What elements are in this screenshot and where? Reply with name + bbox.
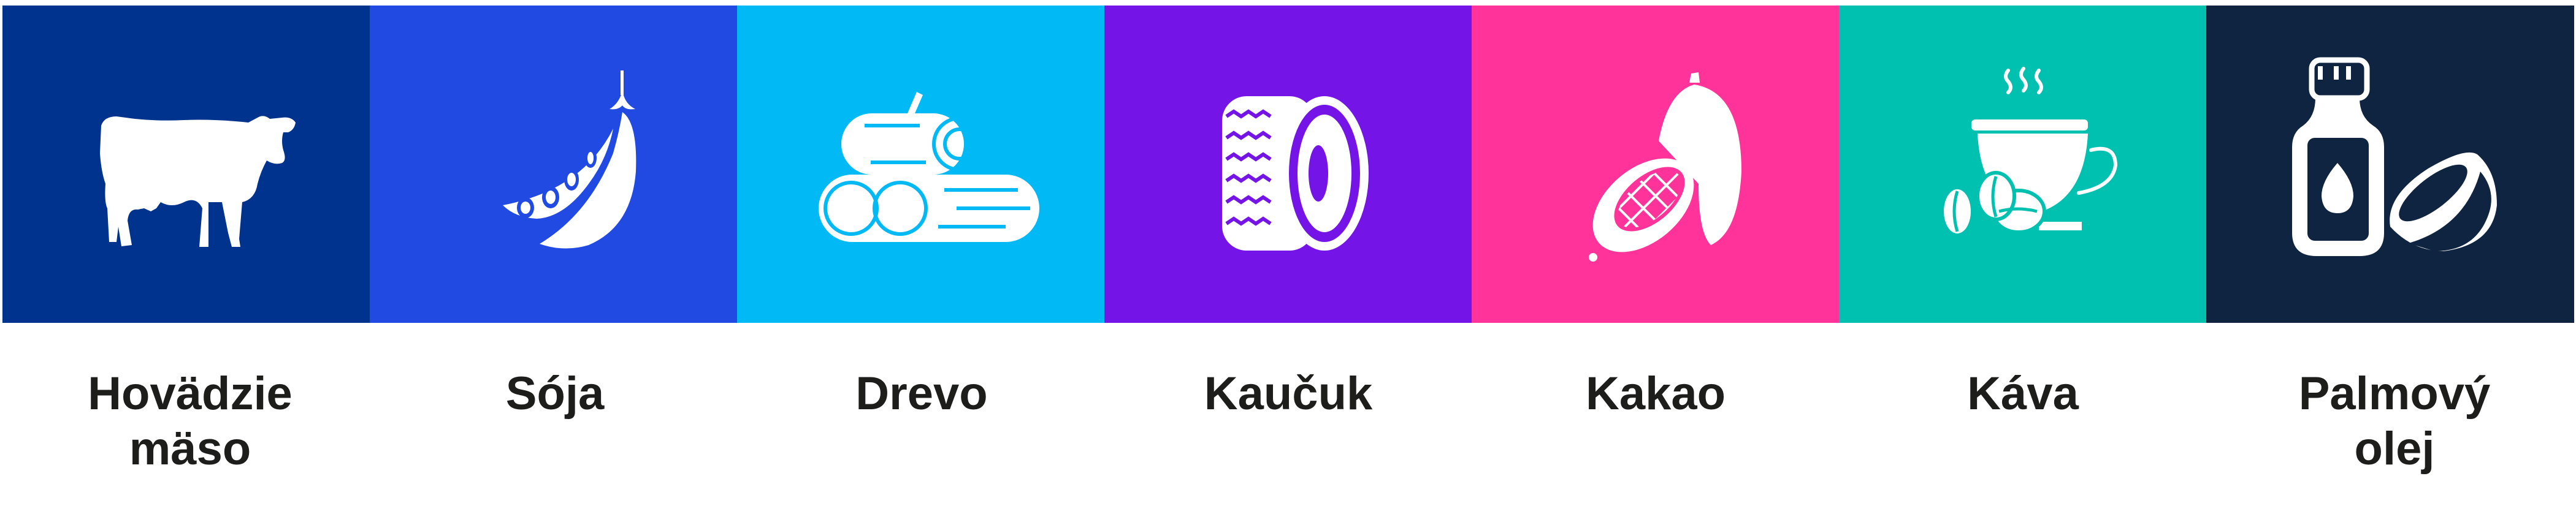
label: wood: Drevo [855, 368, 988, 420]
icon: cow [100, 116, 296, 247]
panel: palm oil [2206, 6, 2574, 323]
label: beef: Hovädzie [88, 368, 292, 420]
panel: beef [2, 6, 370, 323]
icon: coffee cup [1944, 69, 2115, 233]
icon: tire [1222, 96, 1369, 251]
label: cocoa: Kakao [1586, 368, 1726, 420]
icon: oil bottle and palm nut [2292, 60, 2497, 256]
label: palm oil: Palmový [2299, 368, 2490, 420]
label: rubber: Kaučuk [1204, 368, 1373, 420]
label: soy: Sója [506, 368, 605, 420]
icon: logs [819, 92, 1039, 242]
panel: rubber [1104, 6, 1472, 323]
panel: soy [370, 6, 738, 323]
label: coffee: Káva [1967, 368, 2079, 420]
icon: cocoa pod [1589, 72, 1741, 262]
label: palm oil: olej [2355, 423, 2434, 475]
panel: cocoa [1472, 6, 1840, 323]
panel: wood [737, 6, 1105, 323]
icon: soybean pod [503, 70, 636, 249]
panel: coffee [1839, 6, 2207, 323]
label: beef: mäso [129, 423, 251, 475]
